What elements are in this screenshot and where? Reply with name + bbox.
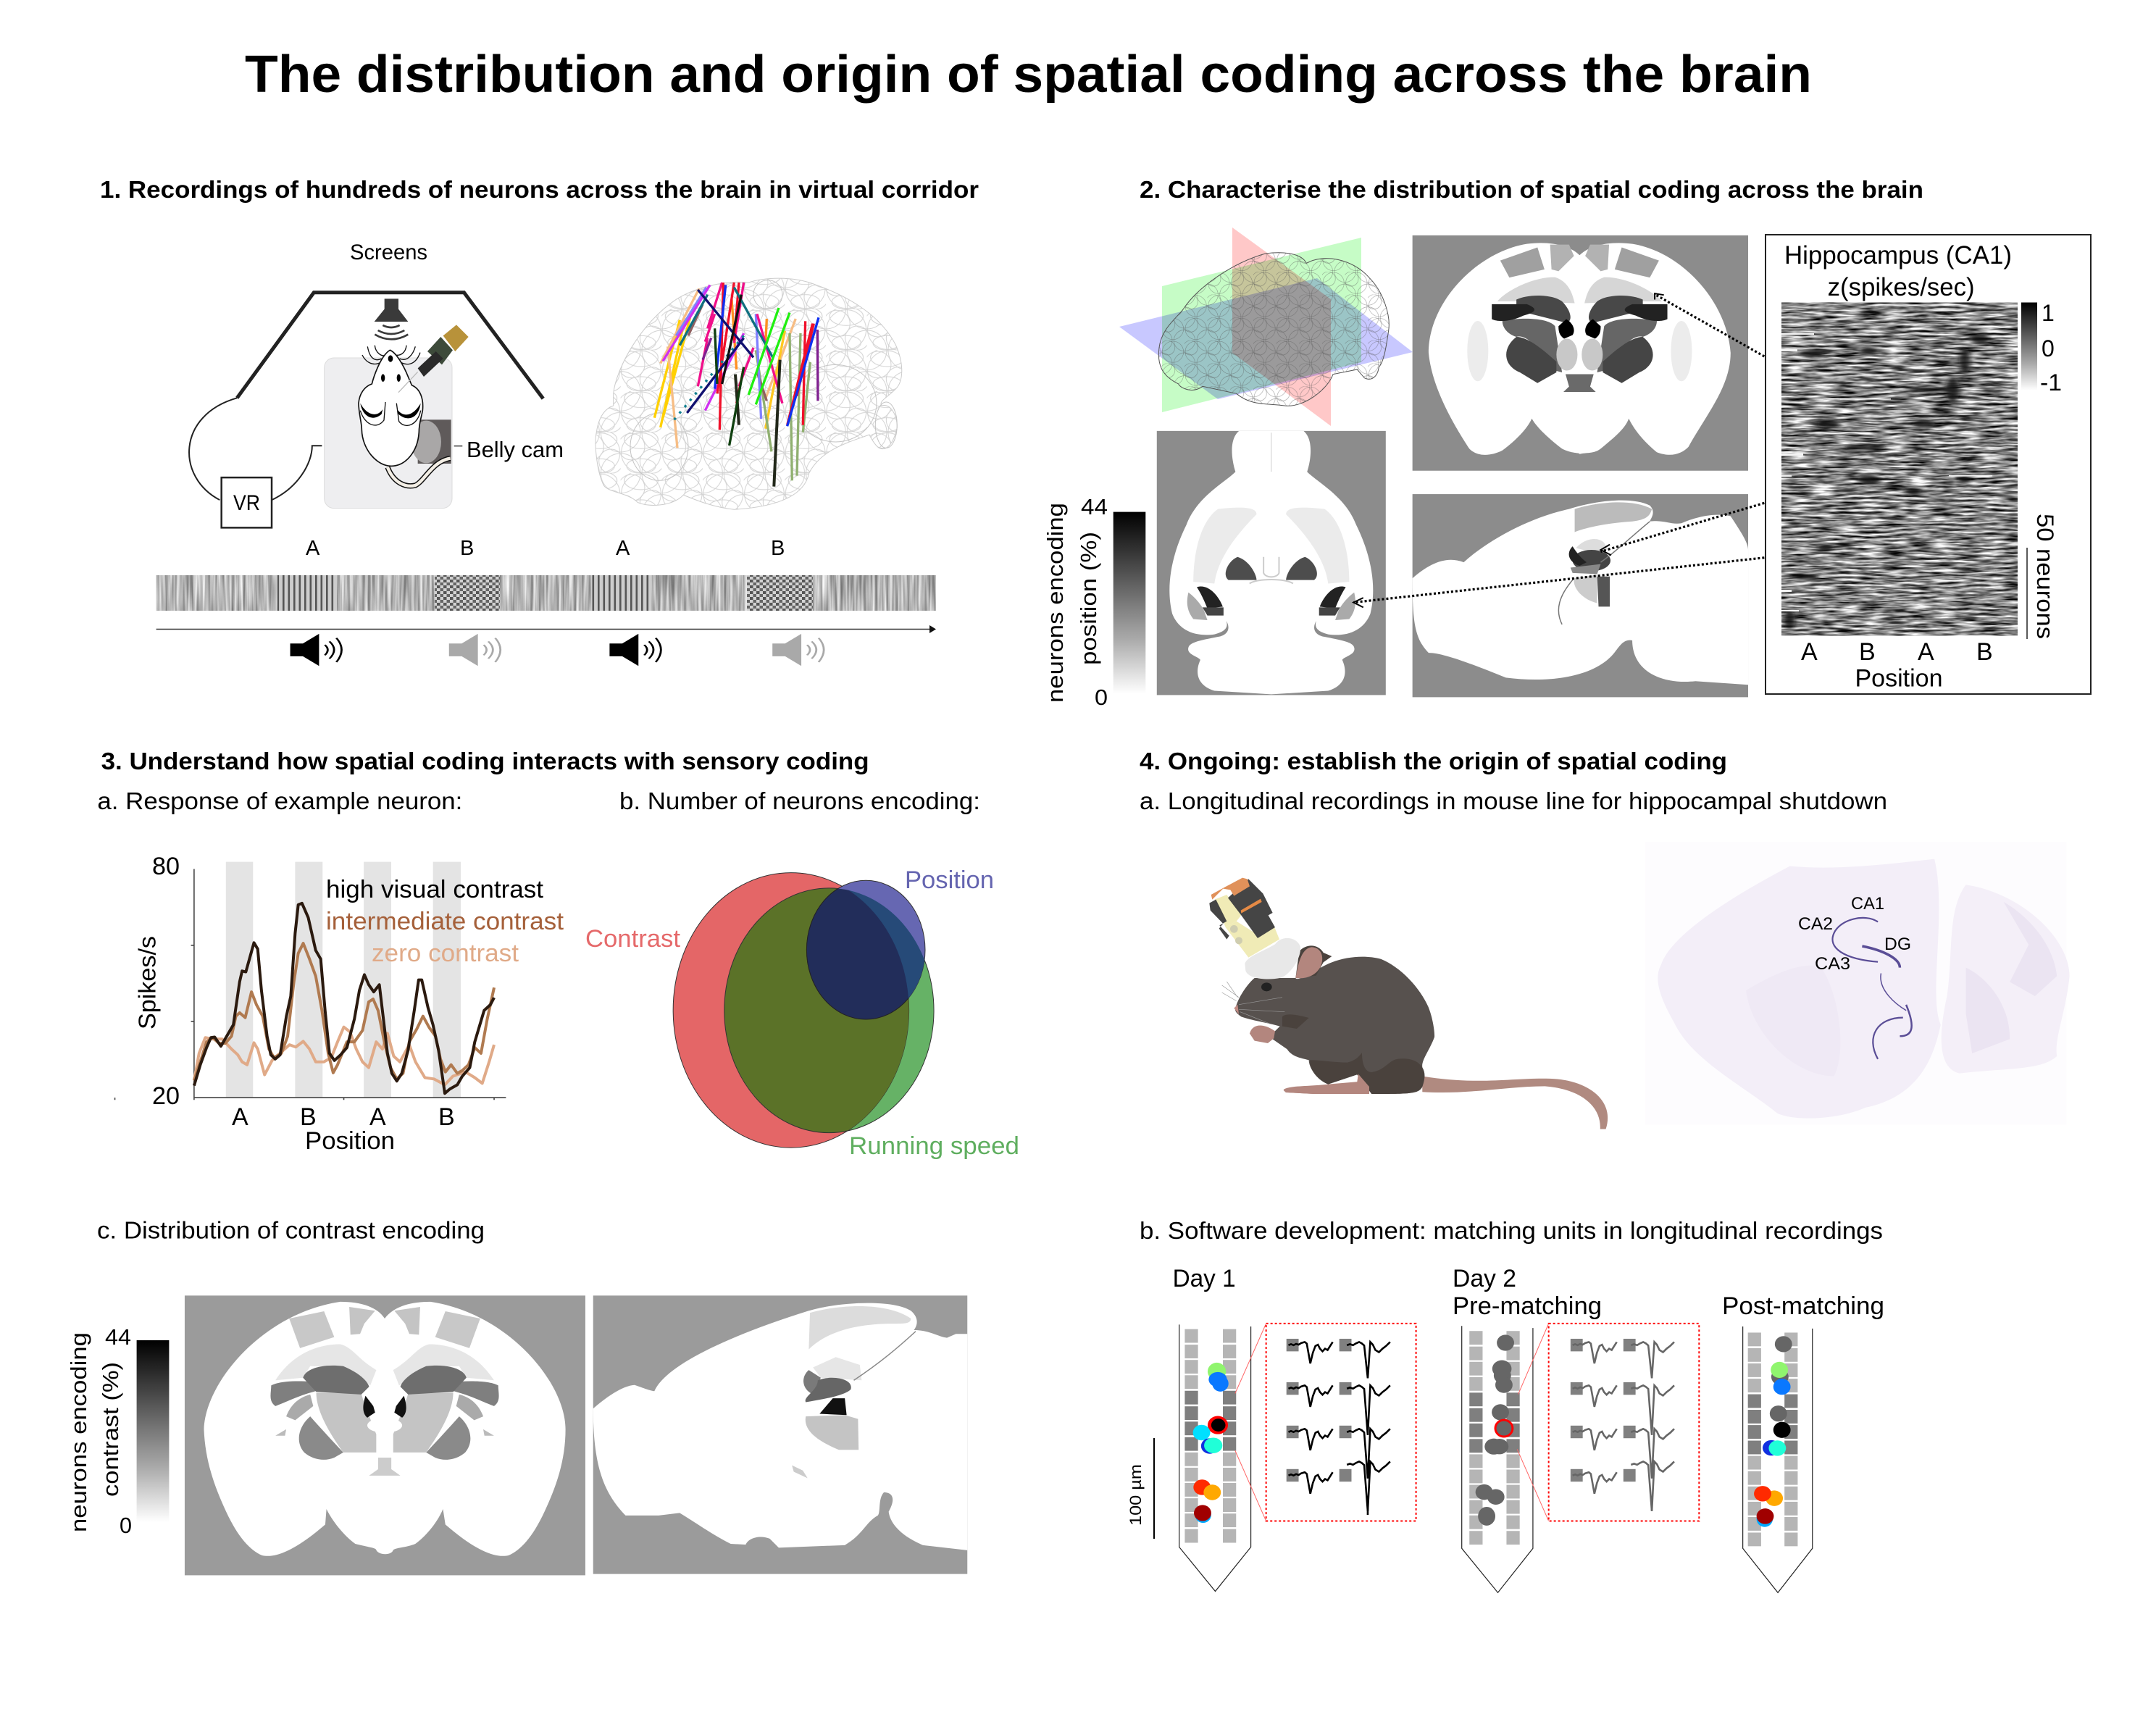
colorbar ticks: z-score: 0 [2042, 335, 2055, 362]
probe: day 1 [1179, 1324, 1251, 1591]
horizontal section: position encoding [1157, 431, 1386, 695]
wireframe brain with probe tracks [596, 278, 902, 509]
axis labels: heatmap positions: B [1976, 638, 1993, 666]
colorbar: position encoding [1081, 494, 1145, 710]
corridor labels: B [771, 537, 785, 560]
colorbar ticks: contrast: 44 [105, 1324, 131, 1350]
line chart: response of example neuron [115, 862, 506, 1100]
colorbar axis label: position: position (%) [1076, 532, 1101, 665]
chart axis labels: B [300, 1103, 317, 1131]
axis labels: heatmap positions: B [1859, 638, 1876, 666]
chart axis labels [133, 853, 455, 1155]
corridor labels: A [306, 537, 320, 560]
colorbar: contrast encoding [105, 1324, 169, 1538]
coronal section: position encoding [1413, 235, 1748, 471]
sagittal section: contrast encoding [593, 1295, 967, 1574]
probe: day 2 pre-matching [1462, 1326, 1533, 1592]
colorbar axis label: contrast [66, 1332, 123, 1532]
icons: speakers [291, 634, 824, 666]
colorbar ticks: z-score: -1 [2040, 369, 2062, 396]
colorbar axis label: position [1043, 503, 1101, 703]
corridor labels: A [616, 537, 630, 560]
colorbar ticks: 44 [1081, 494, 1108, 519]
label: Post-matching: Post-matching [1722, 1292, 1884, 1320]
chart axis labels: 80 [152, 853, 180, 880]
axis labels: heatmap positions: Position [1855, 665, 1943, 693]
histology labels: CA3 [1815, 954, 1850, 974]
colorbar ticks: 0 [1095, 685, 1108, 710]
heading: panel 3: 3. Understand how spatial coding interacts with sensory coding [101, 748, 869, 775]
colorbar ticks: z-score: 1 [2042, 300, 2055, 326]
zoom box: day 2 waveforms [1517, 1324, 1699, 1521]
subheading: 4b: b. Software development: matching units in longitudinal recordings [1140, 1217, 1883, 1244]
corridor labels [306, 537, 785, 560]
scale bar: 100 µm: 100 µm [1127, 1464, 1145, 1526]
label: Day 2 Pre-matching: Day 2 [1453, 1265, 1516, 1292]
histology labels: CA1 [1851, 894, 1884, 914]
label: Day 1: Day 1 [1173, 1265, 1236, 1292]
histology labels: CA2 [1798, 914, 1833, 934]
chart axis labels: Position [305, 1127, 395, 1155]
coronal section: contrast encoding [185, 1295, 585, 1575]
chart legend: high visual contrast [326, 876, 544, 903]
mouse body and implant [1209, 878, 1434, 1094]
label: Day 2 Pre-matching [1453, 1265, 1602, 1320]
subheading: 3b: b. Number of neurons encoding: [619, 787, 980, 814]
panel: hippocampus CA1 heatmap [1766, 235, 2091, 694]
illustration: mouse with implant [1209, 878, 1608, 1129]
colorbar axis label: contrast: neurons encoding [66, 1332, 91, 1532]
heading: panel 1: 1. Recordings of hundreds of neurons across the brain in virtual corridor [100, 177, 979, 204]
venn label: running speed: Running speed [849, 1132, 1019, 1160]
histology: sagittal brain slice [1645, 842, 2070, 1125]
heading: panel 2: 2. Characterise the distribution of spatial coding across the brain [1140, 177, 1923, 204]
colorbar ticks: contrast [105, 1324, 132, 1538]
corridor stimulus strip [156, 575, 936, 611]
chart legend: intermediate contrast [326, 908, 564, 935]
label: Belly cam: Belly cam [467, 437, 564, 462]
subheading: 3c: c. Distribution of contrast encoding [97, 1217, 485, 1243]
scale: 50 neurons: 50 neurons [2032, 514, 2058, 639]
probe: post-matching [1743, 1326, 1813, 1592]
axis labels: heatmap positions: A [1918, 638, 1934, 666]
mouse tail [1422, 1077, 1608, 1129]
scale bar: 100 µm [1127, 1438, 1154, 1539]
venn label: contrast: Contrast [585, 925, 681, 953]
colorbar ticks [1081, 494, 1108, 710]
venn label: position: Position [905, 866, 994, 894]
title: The distribution and origin of spatial coding across the brain [245, 46, 1812, 104]
subheading: 3a: a. Response of example neuron: [97, 787, 462, 814]
chart axis labels: 20 [152, 1082, 180, 1110]
histology labels: DG [1884, 935, 1911, 954]
heading: Hippocampus (CA1): Hippocampus (CA1) [1784, 241, 2012, 269]
label: VR: VR [233, 491, 260, 515]
chart legend [326, 876, 564, 967]
heading: z(spikes/sec): z(spikes/sec) [1828, 273, 1975, 301]
heading: panel 4: 4. Ongoing: establish the origin of spatial coding [1140, 748, 1727, 775]
histology labels [1798, 894, 1911, 974]
heatmap: neuron activity [1781, 303, 2018, 636]
arrows: dotted links from heatmap to brain regions [1353, 293, 1764, 607]
sagittal section: position encoding [1413, 494, 1748, 697]
mouse on treadmill [325, 298, 469, 509]
colorbar ticks: z-score [2040, 300, 2062, 396]
chart axis labels: B [438, 1103, 455, 1131]
subheading: 4a: a. Longitudinal recordings in mouse line for hippocampal shutdown [1140, 787, 1887, 814]
3D slicing planes with wireframe brain [1119, 227, 1413, 426]
corridor labels: B [460, 537, 474, 560]
venn diagram: contrast, position, running speed [673, 873, 934, 1148]
arrow: position along corridor [156, 625, 936, 633]
chart axis labels: A [232, 1103, 248, 1131]
screens and cables [189, 293, 543, 527]
panel 1: virtual reality rig schematic [189, 293, 543, 527]
colorbar ticks: contrast: 0 [120, 1513, 132, 1538]
label: Day 2 Pre-matching: Pre-matching [1453, 1292, 1602, 1320]
chart legend: zero contrast [372, 940, 519, 967]
colorbar: z-score [2021, 303, 2037, 390]
chart axis labels: A [369, 1103, 386, 1131]
zoom box: day 1 waveforms [1235, 1324, 1416, 1521]
label: Screens: Screens [350, 241, 427, 264]
axis labels: heatmap positions [1801, 638, 1993, 693]
chart axis labels: Spikes/s [133, 936, 161, 1029]
colorbar axis label: contrast: contrast (%) [98, 1362, 123, 1497]
colorbar axis label: position: neurons encoding [1043, 503, 1068, 703]
axis labels: heatmap positions: A [1801, 638, 1818, 666]
